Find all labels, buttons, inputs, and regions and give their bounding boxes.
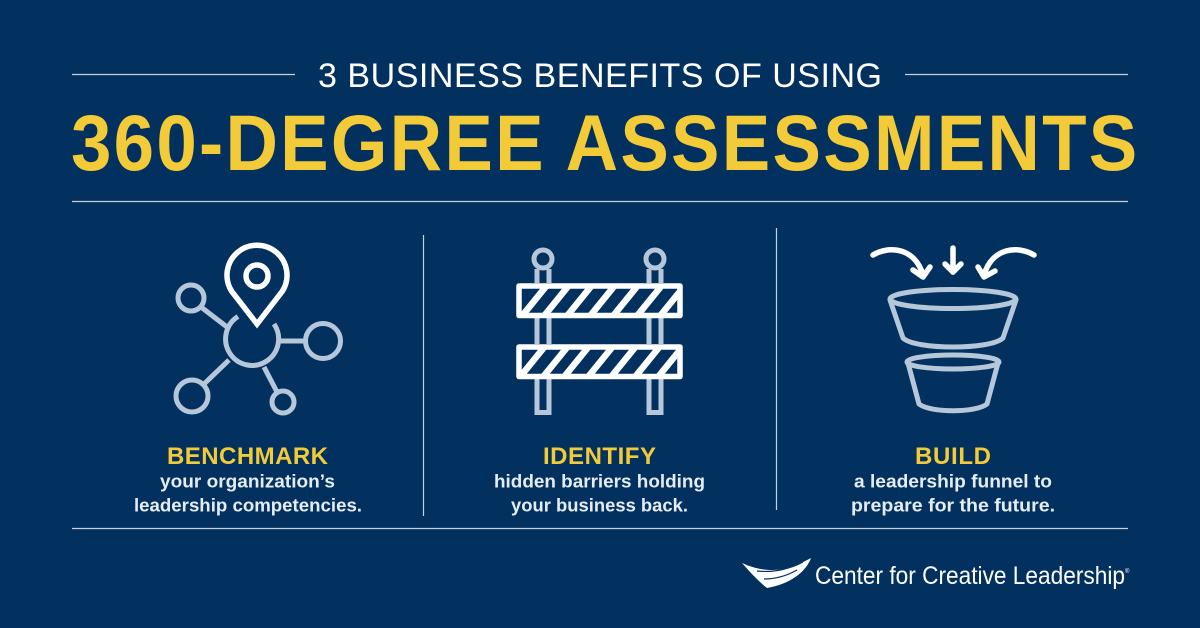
text: benchmark description: leadership competencies. [134,496,362,516]
heading: 3 business benefits of using: 3 BUSINESS BENEFITS OF USING [318,57,882,95]
panel: identify [494,250,705,516]
text: registered mark: ® [1125,568,1130,575]
icon: road barrier [519,250,686,412]
text: build description: a leadership funnel to [854,472,1052,492]
text: organisation name: Center for Creative Leadership [815,562,1125,590]
panel: benchmark [134,245,362,516]
icon: leadership funnel with arrows [873,248,1034,411]
text: identify description: hidden barriers holding [494,472,705,492]
title: 360-degree assessments: 360-DEGREE ASSESSMENTS [71,99,1137,188]
logo: center for creative leadership [742,558,1130,590]
label: build: BUILD [915,443,991,470]
text: build description: prepare for the future. [851,496,1055,516]
icon: logo wing [742,558,811,588]
icon: network with location pin [176,245,340,413]
label: identify: IDENTIFY [543,443,656,470]
label: benchmark: BENCHMARK [167,443,329,470]
panel: build [851,248,1055,516]
text: identify description: your business back. [511,496,688,516]
text: benchmark description: your organization’s [160,472,335,492]
